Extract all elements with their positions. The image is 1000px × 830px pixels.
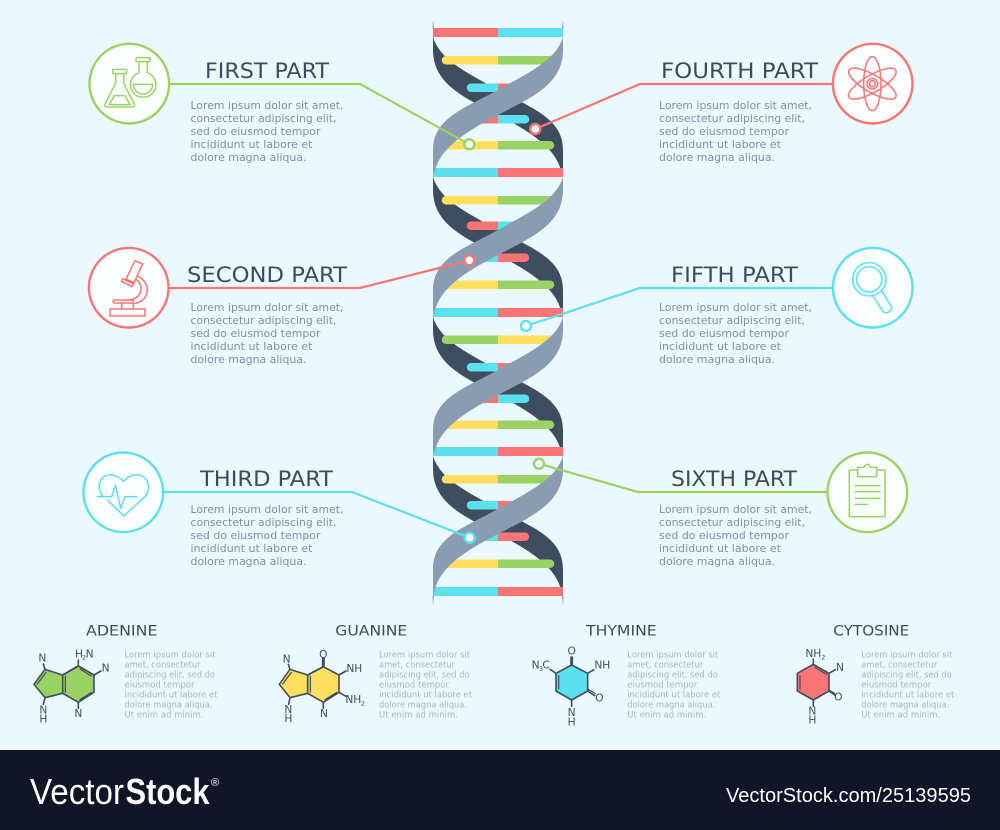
- molecule: guanine: O: [319, 648, 328, 661]
- text block: dolore magna aliqua.: [190, 556, 306, 568]
- molecule: cytosine: O: [834, 690, 843, 703]
- text block: Lorem ipsum dolor sit amet,: [190, 504, 344, 516]
- DNA double helix: [432, 20, 564, 606]
- text block: eiusmod tempor: [124, 681, 195, 691]
- text block: [190, 100, 344, 164]
- molecule: cytosine: 2: [821, 654, 825, 661]
- molecule: adenine: N: [86, 647, 94, 660]
- molecule: adenine: H: [39, 713, 47, 726]
- base pair rungs: [433, 28, 563, 596]
- text block: dolore magna aliqua.: [190, 152, 306, 164]
- panel: third part: [84, 452, 475, 568]
- text block: amet, consectetur: [861, 661, 938, 671]
- molecule: thymine: [532, 645, 610, 728]
- connector line: [535, 84, 833, 129]
- panel: first part: [90, 44, 474, 164]
- heading: SECOND PART: [187, 263, 347, 287]
- heading: ADENINE: [86, 624, 158, 640]
- molecule: cytosine: [797, 647, 844, 727]
- text block: adipiscing elit, sed do: [379, 671, 470, 681]
- icon circle: [833, 44, 912, 123]
- molecule: thymine: O: [567, 645, 576, 658]
- panel: thymine: [532, 624, 721, 728]
- text block: sed do eiusmod tempor: [190, 328, 321, 340]
- molecule: adenine: N: [74, 707, 82, 720]
- molecule: guanine: N: [283, 653, 291, 666]
- text block: Ut enim ad minim.: [627, 711, 706, 721]
- molecule: guanine: NH: [346, 662, 362, 675]
- panel: sixth part: [534, 452, 907, 568]
- text block: incididunt ut labore et: [190, 543, 312, 555]
- molecule: thymine: N: [532, 659, 540, 672]
- text block: Lorem ipsum dolor sit amet,: [190, 302, 344, 314]
- text block: Lorem ipsum dolor sit amet,: [659, 504, 812, 516]
- marker dot: [530, 124, 540, 134]
- molecule: thymine: O: [595, 691, 604, 704]
- text block: amet, consectetur: [379, 661, 455, 671]
- heading: GUANINE: [335, 624, 407, 640]
- text block: consectetur adipiscing elit,: [190, 517, 336, 529]
- molecule: thymine: 3: [539, 666, 543, 673]
- molecule: adenine: N: [38, 651, 46, 664]
- text block: [627, 651, 721, 721]
- molecule: guanine: H: [284, 712, 292, 725]
- molecule: adenine: N: [102, 661, 110, 674]
- text block: Lorem ipsum dolor sit: [124, 651, 216, 661]
- text block: Lorem ipsum dolor sit amet,: [659, 302, 812, 314]
- text block: incididunt ut labore et: [627, 691, 721, 701]
- molecule: adenine: H: [75, 647, 83, 660]
- footer bar: [0, 750, 1000, 830]
- text block: dolore magna aliqua.: [379, 701, 467, 711]
- molecule: adenine: [34, 647, 110, 726]
- text block: adipiscing elit, sed do: [124, 671, 215, 681]
- heading: THYMINE: [585, 624, 657, 640]
- text block: [659, 100, 812, 164]
- text block: incididunt ut labore et: [124, 691, 218, 701]
- text block: [190, 302, 344, 366]
- footer logo: ®: [211, 777, 219, 789]
- text block: Ut enim ad minim.: [861, 711, 940, 721]
- molecule: thymine: NH: [594, 659, 610, 672]
- heading: SIXTH PART: [671, 467, 797, 491]
- panel: guanine: [279, 624, 472, 725]
- text block: Ut enim ad minim.: [124, 711, 204, 721]
- text block: incididunt ut labore et: [190, 139, 312, 151]
- text block: dolore magna aliqua.: [627, 701, 715, 711]
- heading: FOURTH PART: [661, 59, 818, 83]
- text block: consectetur adipiscing elit,: [659, 315, 805, 327]
- molecule: guanine: NH: [345, 693, 361, 706]
- panel: adenine: [34, 624, 218, 726]
- text block: dolore magna aliqua.: [659, 354, 775, 366]
- text block: eiusmod tempor: [379, 681, 449, 691]
- strand: grey front ribbon: [433, 37, 563, 596]
- marker dot: [464, 139, 474, 149]
- text block: sed do eiusmod tempor: [659, 328, 790, 340]
- molecule: cytosine: N: [836, 661, 844, 674]
- text block: Lorem ipsum dolor sit: [861, 651, 953, 661]
- molecule: adenine: N: [39, 704, 47, 717]
- connector line: [168, 84, 469, 144]
- text block: incididunt ut labore et: [190, 341, 312, 353]
- marker dot: [464, 255, 474, 265]
- panel: cytosine: [797, 624, 955, 727]
- connector line: [168, 260, 469, 288]
- text block: eiusmod tempor: [627, 681, 698, 691]
- text block: [379, 651, 472, 721]
- heading: FIFTH PART: [671, 263, 798, 287]
- text block: amet, consectetur: [124, 661, 201, 671]
- icon: magnifying glass: [853, 263, 892, 313]
- molecule: cytosine: NH: [805, 647, 821, 660]
- heading: FIRST PART: [205, 59, 329, 83]
- text block: sed do eiusmod tempor: [659, 126, 790, 138]
- text block: incididunt ut labore et: [659, 341, 781, 353]
- text block: Lorem ipsum dolor sit amet,: [190, 100, 344, 112]
- molecule: thymine: C: [542, 659, 550, 672]
- strand: dark back ribbon: [433, 37, 563, 596]
- icon: clipboard: [849, 464, 885, 517]
- text block: dolore magna aliqua.: [659, 556, 775, 568]
- text block: consectetur adipiscing elit,: [659, 517, 805, 529]
- text block: consectetur adipiscing elit,: [659, 113, 805, 125]
- text block: consectetur adipiscing elit,: [190, 113, 336, 125]
- text block: dolore magna aliqua.: [124, 701, 212, 711]
- icon: flasks: [105, 58, 156, 107]
- panel: fourth part: [530, 44, 912, 164]
- text block: adipiscing elit, sed do: [861, 671, 952, 681]
- icon circle: [84, 452, 163, 532]
- panel: second part: [89, 248, 474, 366]
- text block: dolore magna aliqua.: [190, 354, 306, 366]
- text block: Lorem ipsum dolor sit: [627, 651, 719, 661]
- icon circle: [833, 248, 912, 328]
- text block: sed do eiusmod tempor: [190, 126, 321, 138]
- footer image id: VectorStock.com/25139595: [726, 785, 971, 807]
- molecule: thymine: N: [568, 706, 576, 719]
- icon: microscope: [110, 261, 147, 316]
- strand fading tips: [432, 20, 564, 606]
- connector line: [163, 492, 470, 538]
- text block: eiusmod tempor: [861, 681, 932, 691]
- icon circle: [828, 452, 907, 532]
- molecule: cytosine: N: [808, 705, 816, 718]
- text block: incididunt ut labore et: [379, 691, 472, 701]
- marker dot: [465, 533, 475, 543]
- text block: sed do eiusmod tempor: [659, 530, 790, 542]
- connector line: [526, 288, 833, 326]
- text block: amet, consectetur: [627, 661, 704, 671]
- text block: [124, 651, 218, 721]
- text block: [659, 504, 812, 568]
- footer logo: Stock: [126, 771, 210, 812]
- molecule: guanine: N: [284, 703, 292, 716]
- icon circle: [89, 248, 168, 328]
- molecule: guanine: [279, 648, 365, 725]
- text block: adipiscing elit, sed do: [627, 671, 718, 681]
- text block: incididunt ut labore et: [659, 139, 781, 151]
- panel: fifth part: [521, 248, 912, 366]
- marker dot: [521, 321, 531, 331]
- icon circle: [90, 44, 169, 123]
- molecule: guanine: 2: [361, 700, 365, 707]
- icon: atom: [845, 57, 900, 111]
- text block: dolore magna aliqua.: [861, 701, 949, 711]
- molecule: cytosine: H: [808, 714, 816, 727]
- icon: heart with pulse: [98, 475, 148, 516]
- text block: [190, 504, 344, 568]
- text block: Lorem ipsum dolor sit: [379, 651, 470, 661]
- connector line: [539, 464, 827, 492]
- heading: THIRD PART: [199, 467, 333, 491]
- text block: Lorem ipsum dolor sit amet,: [659, 100, 812, 112]
- molecule: guanine: N: [320, 707, 328, 720]
- text block: dolore magna aliqua.: [659, 152, 775, 164]
- molecule: adenine: 2: [82, 654, 86, 661]
- footer logo: Vector: [30, 771, 124, 812]
- text block: Ut enim ad minim.: [379, 711, 458, 721]
- footer logo: [30, 771, 219, 812]
- text block: incididunt ut labore et: [861, 691, 955, 701]
- text block: incididunt ut labore et: [659, 543, 781, 555]
- molecule: thymine: H: [568, 715, 576, 728]
- text block: [659, 302, 812, 366]
- heading: CYTOSINE: [833, 624, 909, 640]
- marker dot: [534, 459, 544, 469]
- text block: consectetur adipiscing elit,: [190, 315, 336, 327]
- text block: sed do eiusmod tempor: [190, 530, 321, 542]
- text block: [861, 651, 955, 721]
